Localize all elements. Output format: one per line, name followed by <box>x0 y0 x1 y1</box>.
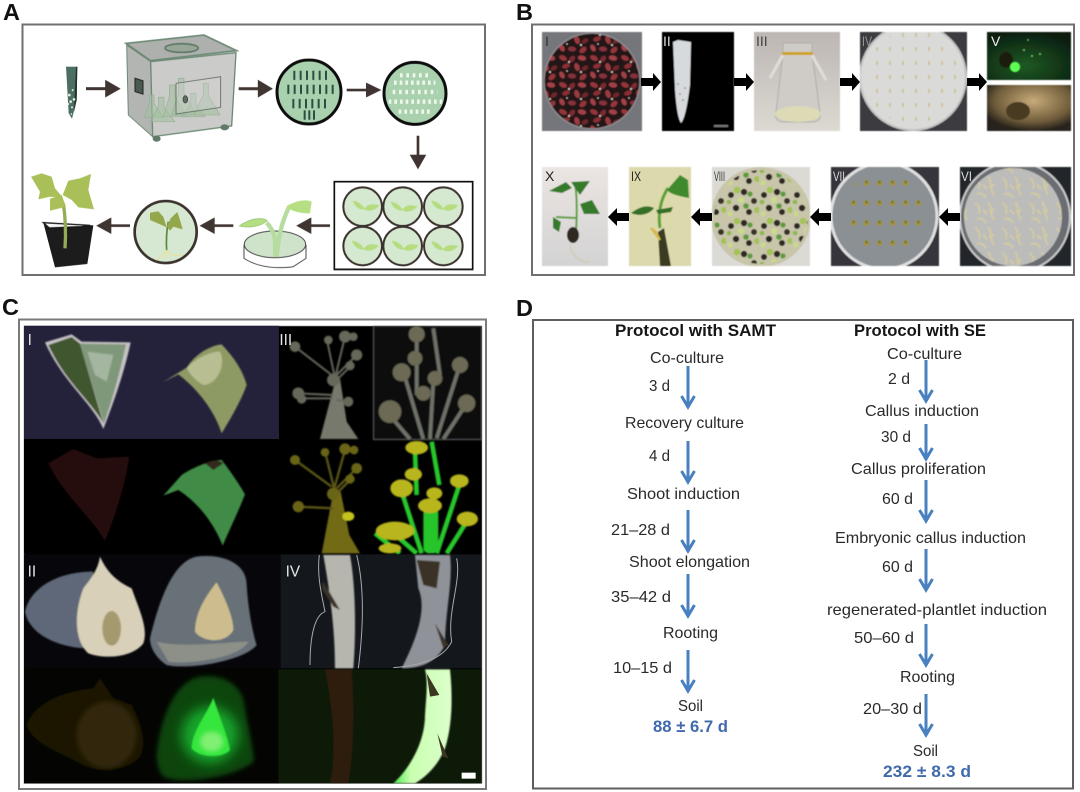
photo VIII: regenerating shoots <box>711 167 811 267</box>
flow arrows <box>920 360 932 735</box>
icon: plantlet in dish <box>239 200 312 268</box>
icon: ultrasonic bath <box>126 35 237 142</box>
column: protocol with SE: regenerated-plantlet induction <box>827 602 1047 619</box>
column: protocol with SAMT: Co-culture <box>650 350 724 367</box>
column: protocol with SAMT <box>611 321 777 736</box>
micrograph III: bright-field shoot tips <box>290 326 482 440</box>
column: protocol with SAMT: Rooting <box>663 625 718 642</box>
column: protocol with SAMT: 35–42 d <box>611 589 671 606</box>
column: protocol with SAMT: 10–15 d <box>613 660 672 677</box>
micrograph I: fluorescence leaves <box>24 439 246 554</box>
icon: explant <box>66 67 77 119</box>
micrograph II: bright-field explants <box>24 554 281 668</box>
micrograph II: fluorescence explants <box>24 668 279 783</box>
arrow <box>99 220 130 232</box>
panel B: photo sequence <box>532 24 1074 275</box>
column: protocol with SE: Co-culture <box>887 346 962 363</box>
arrows: row 1 <box>641 73 987 91</box>
photo VI: sprouting tissue <box>960 162 1071 272</box>
photo numerals: X <box>545 168 555 184</box>
column: protocol with SE: 232 ± 8.3 d <box>883 763 971 781</box>
column: protocol with SE <box>827 321 1047 781</box>
column: protocol with SAMT: 88 ± 6.7 d <box>653 718 728 736</box>
photo III: flask <box>754 32 840 131</box>
column: protocol with SE: Callus proliferation <box>851 461 986 478</box>
column: protocol with SAMT: 21–28 d <box>611 522 670 539</box>
micrograph numerals: II <box>28 564 36 581</box>
micrograph numerals: I <box>28 332 32 349</box>
micrograph IV: bright-field stems <box>281 554 482 668</box>
photo numerals: II <box>663 33 671 49</box>
column: protocol with SAMT: Shoot induction <box>627 486 740 503</box>
column: protocol with SE: 60 d <box>882 559 913 576</box>
micrograph III: fluorescence shoot tips <box>290 441 478 553</box>
column: protocol with SAMT: 4 d <box>649 448 670 465</box>
column: protocol with SE: 50–60 d <box>854 630 914 647</box>
micrograph IV: fluorescence stems <box>278 669 482 783</box>
photo IV: plated tissue <box>860 24 967 131</box>
icon: culture dish with explants <box>277 60 341 124</box>
arrows: row 2 <box>608 208 960 226</box>
micrograph I: bright-field leaves <box>24 326 279 439</box>
column: protocol with SE: Protocol with SE <box>854 321 986 340</box>
photo I: seeds <box>542 32 642 131</box>
micrograph numerals: IV <box>286 564 301 581</box>
panel label C: C <box>2 294 19 320</box>
panel A: workflow illustration <box>22 24 485 275</box>
column: protocol with SAMT: Shoot elongation <box>629 554 750 571</box>
arrow <box>239 82 270 95</box>
photo numerals <box>545 33 1001 184</box>
arrow <box>412 136 424 167</box>
photo numerals: VII <box>833 168 845 184</box>
icon: potted plant <box>31 173 94 267</box>
icon: six-well plate <box>334 182 473 269</box>
photo V: fluorescent and bright-field views <box>987 32 1071 131</box>
micrograph numerals <box>28 332 301 581</box>
photo numerals: VIII <box>714 168 725 184</box>
arrow <box>347 85 378 95</box>
photo numerals: I <box>545 33 549 49</box>
column: protocol with SAMT: Protocol with SAMT <box>615 321 777 340</box>
panel D: protocol comparison <box>533 320 1073 788</box>
photo X: rooted plantlet <box>542 167 608 266</box>
column: protocol with SAMT: Recovery culture <box>625 415 744 432</box>
flow arrows <box>682 366 694 691</box>
panel label D: D <box>516 295 533 321</box>
column: protocol with SAMT: 3 d <box>649 378 670 395</box>
column: protocol with SE: 30 d <box>881 429 911 446</box>
arrow <box>202 220 233 232</box>
arrow <box>299 220 330 232</box>
photo numerals: IX <box>631 168 641 184</box>
column: protocol with SE: Callus induction <box>865 403 979 420</box>
column: protocol with SE: Rooting <box>900 669 955 686</box>
icon: dish with cut tissue <box>384 62 446 124</box>
photo numerals: VI <box>961 168 972 184</box>
panel C: tissue micrographs <box>19 320 486 789</box>
photo VII: callus plate <box>831 163 939 269</box>
icon: rooted plantlet in dish <box>135 201 197 263</box>
photo II: excised embryo <box>662 32 734 131</box>
photo numerals: V <box>991 33 1001 49</box>
photo numerals: III <box>756 33 768 49</box>
photo numerals: IV <box>862 33 872 49</box>
photo IX: plantlet close-up <box>629 167 691 266</box>
column: protocol with SE: Embryonic callus induction <box>835 530 1026 547</box>
arrow <box>86 82 118 95</box>
scale bar <box>462 773 476 779</box>
column: protocol with SE: Soil <box>913 743 938 760</box>
column: protocol with SE: 60 d <box>882 491 913 508</box>
column: protocol with SAMT: Soil <box>678 698 703 715</box>
micrograph numerals: III <box>279 332 292 349</box>
column: protocol with SE: 20–30 d <box>863 701 922 718</box>
column: protocol with SE: 2 d <box>888 371 910 388</box>
